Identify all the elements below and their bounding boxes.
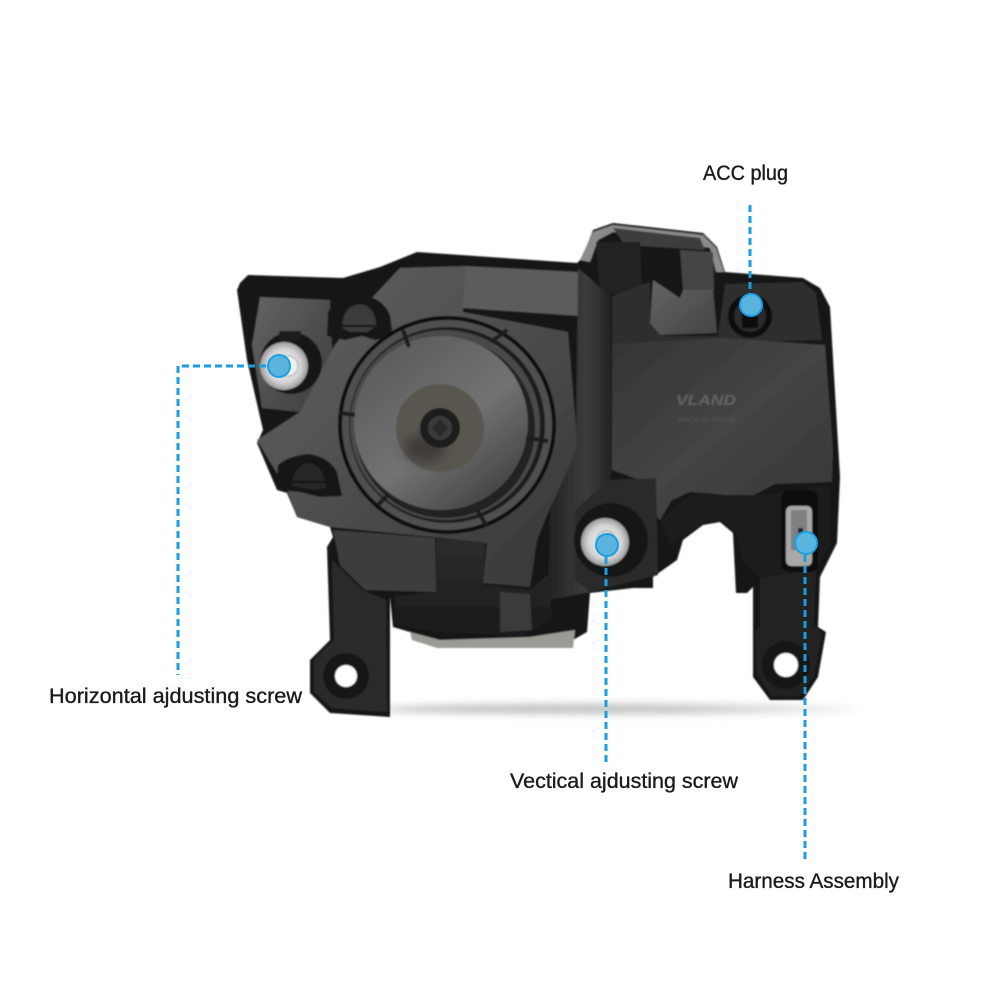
headlight housing [237,223,840,717]
left bracket [314,560,387,712]
embossed caption: MADE IN CHINA [678,417,735,424]
right column [548,268,612,600]
vertical adjusting bolt [574,478,658,592]
embossed logo: VLAND [676,392,736,409]
top cap dark blocks [596,242,642,296]
callout: ACC plug [703,162,788,316]
left bulb panel [252,297,338,440]
callout: harness assembly [728,532,899,893]
right bracket [755,570,822,696]
top cap wedge [613,228,705,250]
ground shadow [380,704,860,714]
bottom bulb socket [277,454,342,497]
hub socket [420,408,460,448]
callout: horizontal adjusting screw: Horizontal ajdusting screw [49,685,303,708]
mounting hole right [762,641,810,689]
ACC socket [728,294,772,338]
upper rectangular panel [463,266,580,316]
housing silhouette [237,223,840,717]
mounting hole left [323,653,369,699]
top cap light edge [580,225,724,272]
top cap inner block [680,250,714,290]
disc clips [340,330,548,525]
raised block [650,280,717,335]
lower block highlight [500,592,532,632]
lower left panel [333,530,436,592]
callout: vertical adjusting screw [510,534,739,793]
horizontal adjusting bolt [260,331,322,394]
lower dark motor blocks [395,538,552,636]
logo text area [676,392,736,424]
hub [396,384,484,472]
upper right panel [612,282,822,345]
callout: harness assembly: Harness Assembly [728,870,899,893]
lower right dark section [660,485,830,578]
large right panel [612,338,833,520]
callout: vertical adjusting screw: Vectical ajdusting screw [510,770,739,793]
disc assembly [338,316,556,534]
main panel around disc [257,266,578,587]
silver base strip [410,630,575,648]
harness connector [781,490,818,572]
top bulb socket [327,295,392,340]
callout: ACC plug: ACC plug [703,162,788,185]
callout: horizontal adjusting screw [49,355,303,708]
